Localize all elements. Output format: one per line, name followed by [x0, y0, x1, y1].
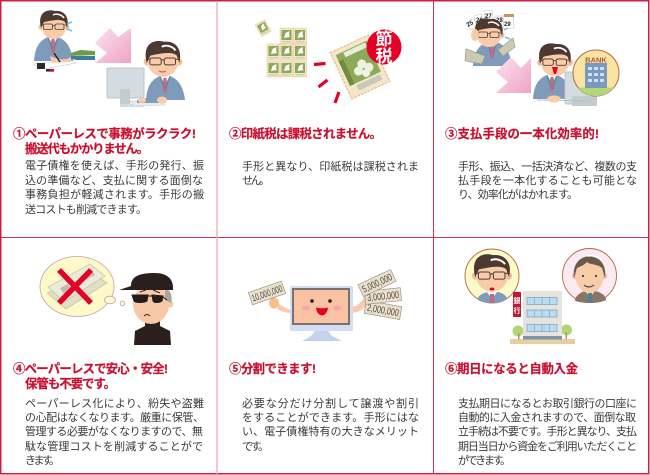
illustration: two men in circles and bank building: 銀 [514, 296, 520, 305]
heading 2: ②印紙税は課税されません。 [229, 126, 382, 141]
body text 3: 払手段を一本化することも可能とな [458, 173, 637, 187]
body text 1: 事務負担が軽減されます。手形の搬 [25, 187, 204, 201]
body text 3 [458, 159, 637, 201]
body text 6: 自動的に入金されますので、面倒な取 [458, 410, 636, 424]
panel 6: automatic deposit [445, 248, 637, 467]
panel 5: splittable [229, 270, 419, 453]
illustration: smiling monitor holding notes [248, 270, 402, 341]
body text 6: ができます。 [458, 453, 511, 467]
illustration: man with calendars, notes and bank: 29 [504, 22, 511, 28]
body text 5: をすることができます。手形にはな [242, 410, 419, 424]
body text 5 [242, 396, 419, 453]
heading 4 [13, 361, 168, 391]
body text 4 [25, 396, 204, 467]
illustration: man with calendars, notes and bank: BANK [585, 56, 607, 64]
heading 1: ①ペーパーレスで事務がラクラク! [13, 126, 196, 141]
illustration: smiling monitor holding notes: 10,000,000 [250, 284, 284, 304]
body text 6 [458, 396, 637, 467]
body text 5: 必要な分だけ分割して譲渡や割引 [242, 396, 419, 410]
body text 6: 立手続は不要です。手形と異なり、支払 [458, 424, 637, 438]
illustration: man with calendars, notes and bank: 25 [466, 20, 475, 29]
body text 1: 電子債権を使えば、手形の発行、振 [25, 158, 204, 172]
illustration: revenue stamps with tax saving badge: 節 [376, 29, 392, 49]
body text 4: 駄な管理コストを削減することがで [25, 439, 203, 453]
body text 4: ペーパーレス化により、紛失や盗難 [25, 396, 204, 410]
illustration: smiling monitor holding notes: 5,000,000 [361, 272, 395, 296]
arrow [95, 28, 131, 63]
illustration: man with calendars, notes and bank: 27 [485, 14, 492, 20]
panel 3: unified payment method [445, 10, 637, 201]
body text 2: 手形と異なり、印紙税は課税されま [242, 159, 419, 173]
body text 1: 送コストも削減できます。 [25, 202, 147, 216]
illustration: man with calendars, notes and bank: 28 [496, 18, 503, 24]
heading 6: ⑥期日になると自動入金 [445, 361, 579, 376]
body text 6: 期日当日から資金をご利用いただくこと [458, 439, 637, 453]
body text 5: い、電子債権特有の大きなメリット [242, 424, 419, 438]
heading 5: ⑤分割できます! [229, 361, 316, 376]
body text 4: の心配はなくなります。厳重に保管、 [25, 410, 204, 424]
heading 4: 保管も不要です。 [25, 376, 116, 391]
body text 1: 込の準備など、支払に関する面倒な [25, 173, 203, 187]
illustration: revenue stamps with tax saving badge [255, 19, 402, 103]
illustration: smiling monitor holding notes: 3,000,000 [367, 290, 400, 304]
body text 4: 管理する必要がなくなりますので、無 [25, 424, 203, 438]
illustration: revenue stamps with tax saving badge: 税 [376, 47, 392, 66]
illustration: thief thinking of crossed out notes [40, 256, 174, 345]
illustration: man with calendars, notes and bank [465, 10, 619, 106]
body text 6: 支払期日になるとお取引銀行の口座に [458, 396, 637, 410]
illustration: smiling monitor holding notes: 2,000,000 [366, 303, 400, 319]
panel 2: no stamp duty [229, 19, 419, 187]
heading 4: ④ペーパーレスで安心・安全! [13, 361, 168, 376]
panel 4: safe and secure [13, 256, 204, 467]
body text 2 [242, 159, 419, 187]
arrow [496, 57, 531, 93]
body text 2: せん。 [242, 174, 270, 187]
body text 3: り、効率化がはかれます。 [458, 187, 578, 201]
body text 1 [25, 158, 204, 216]
heading 1 [13, 126, 196, 156]
illustration: two men in circles and bank building [465, 248, 616, 344]
heading 3: ③支払手段の一本化効率的! [445, 126, 599, 141]
illustration: man with calendars, notes and bank: 26 [476, 18, 483, 24]
body text 3: 手形、振込、一括決済など、複数の支 [458, 159, 637, 173]
illustration: worried man and relaxed man [33, 10, 185, 107]
body text 4: きます。 [25, 454, 60, 467]
body text 5: です。 [242, 440, 269, 453]
illustration: two men in circles and bank building: 行 [514, 306, 520, 315]
heading 1: 搬送代もかかりません。 [25, 141, 149, 156]
panel 1: paperless office work [13, 10, 204, 216]
